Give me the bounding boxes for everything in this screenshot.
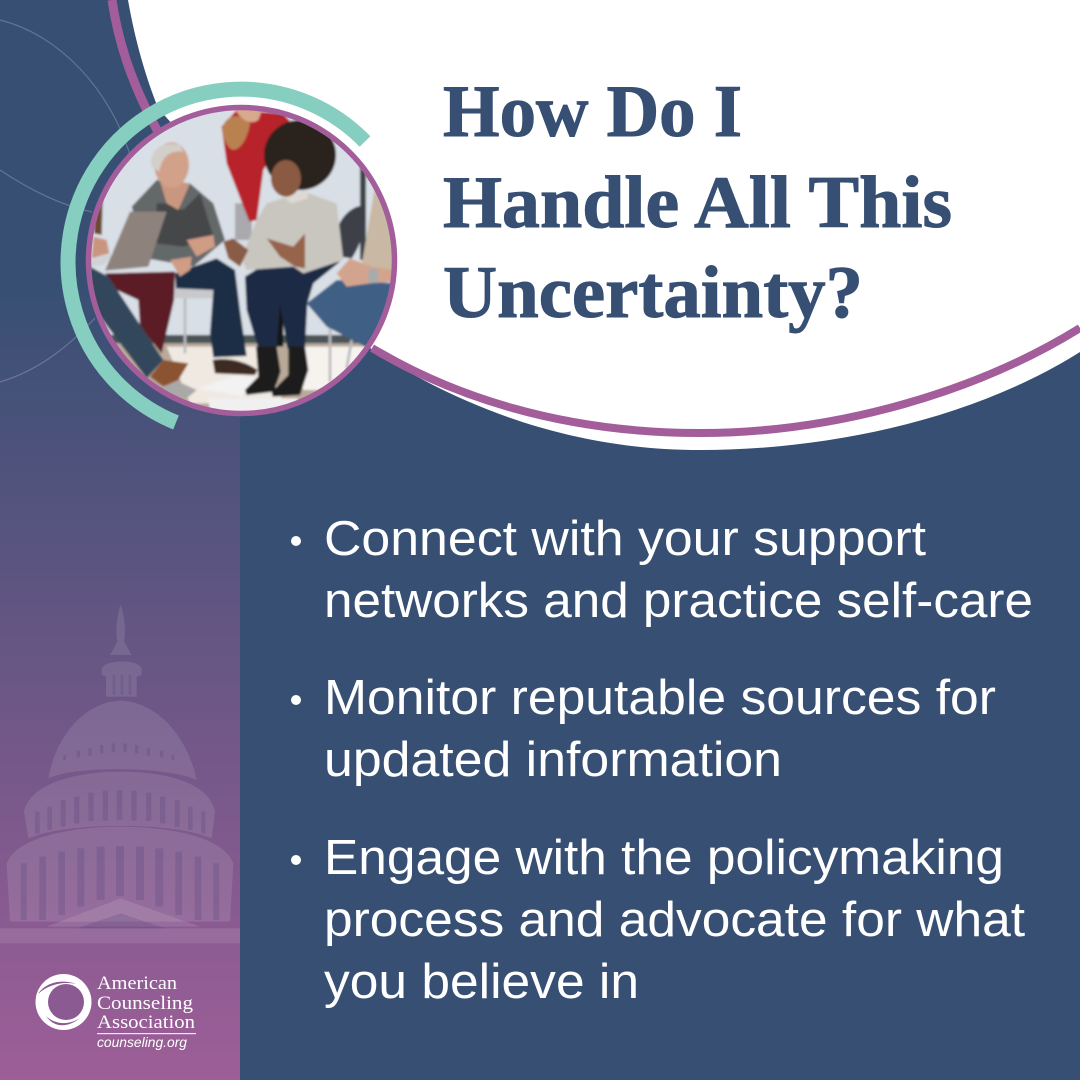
logo wordmark: American	[97, 973, 178, 994]
title: Handle All This	[443, 162, 952, 244]
photo ring	[88, 108, 394, 414]
bullet list	[291, 512, 1033, 1009]
logo wordmark	[97, 973, 196, 1033]
bullet 1: networks and practice self-care	[324, 574, 1033, 628]
panel: left gradient column	[0, 0, 240, 1080]
logo url: counseling.org	[97, 1035, 188, 1050]
bullet 2: Monitor reputable sources for	[324, 671, 996, 725]
logo wordmark: Association	[97, 1012, 196, 1033]
panel: white title shape	[128, 0, 1080, 450]
bullet 3: process and advocate for what	[324, 893, 1025, 947]
bullet 1	[291, 512, 1033, 628]
bullet 3: you believe in	[324, 955, 639, 1009]
icon: capitol building watermark	[0, 605, 240, 943]
photo: group discussion	[91, 110, 392, 411]
icon: logo ring	[36, 974, 92, 1030]
purple curve: left	[112, 0, 157, 130]
decorative thin arcs	[0, 20, 130, 382]
bullet 3: Engage with the policymaking	[324, 831, 1004, 885]
logo: American Counseling Association	[36, 973, 196, 1050]
title: How Do I	[443, 71, 742, 153]
title: Uncertainty?	[443, 252, 863, 334]
bullet 2: updated information	[324, 733, 782, 787]
purple curve: right	[372, 328, 1080, 433]
title	[443, 71, 952, 334]
logo wordmark: Counseling	[97, 993, 194, 1014]
bullet 2	[291, 671, 996, 787]
teal ring arc	[68, 89, 365, 422]
bullet 3	[291, 831, 1025, 1009]
bullet 1: Connect with your support	[324, 512, 926, 566]
